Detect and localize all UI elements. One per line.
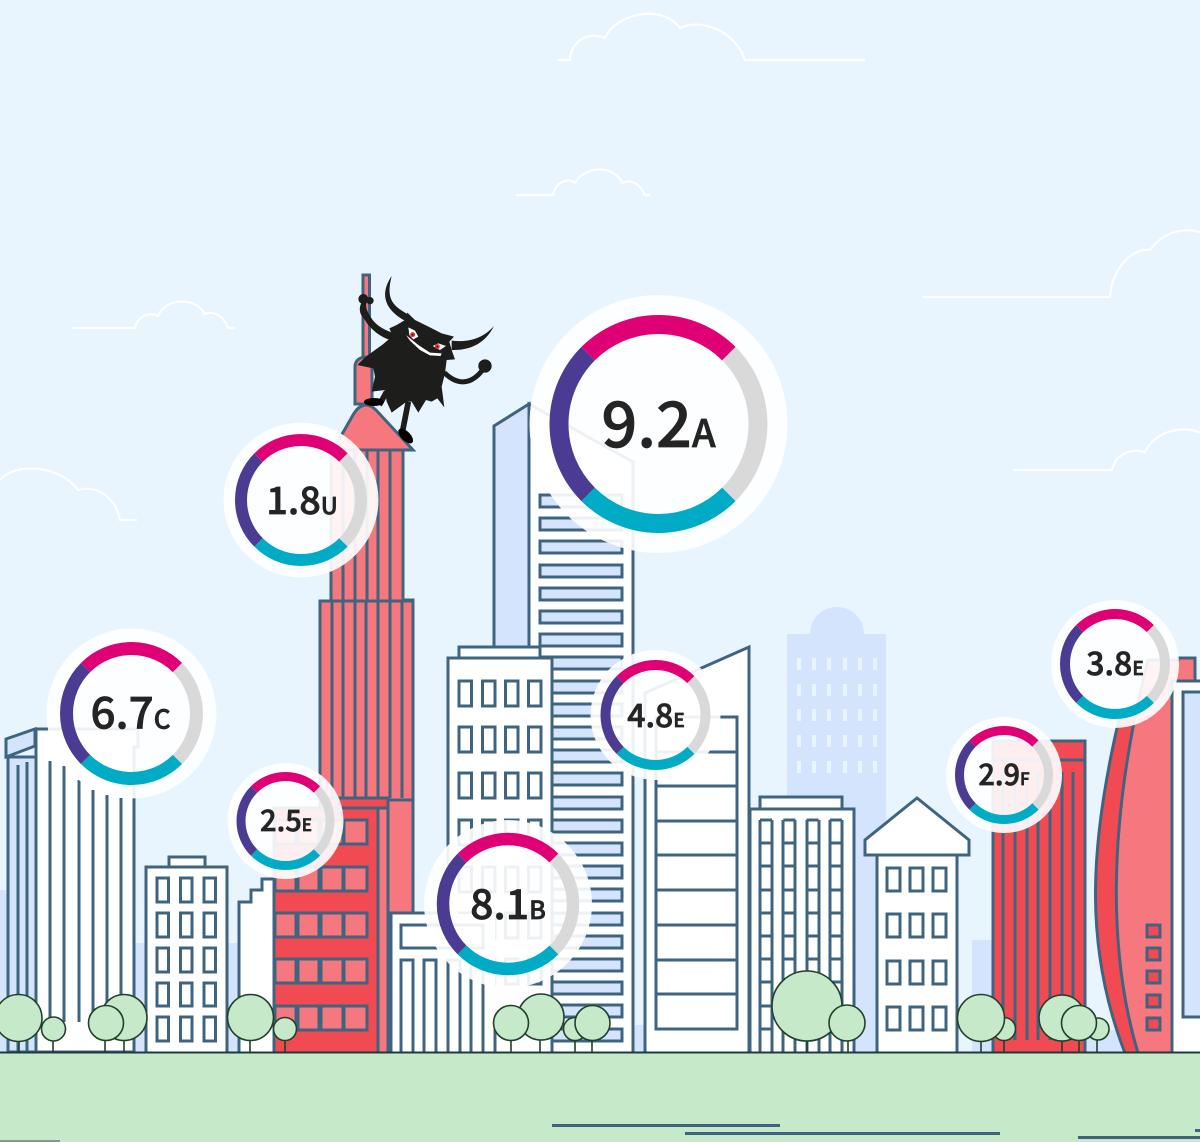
building: red striped block (993, 741, 1085, 1053)
building: red spire tower (274, 275, 413, 1053)
monster on the spire (357, 276, 494, 446)
building: tall glass tower (494, 404, 633, 1053)
building: gridded block (750, 797, 854, 1053)
clouds (0, 14, 1200, 520)
building: curved red tower (1095, 658, 1200, 1053)
rating ring: 8.1 B (424, 820, 592, 988)
rating ring: 1.8 U (224, 422, 378, 578)
rating ring: 2.9 F: 2.9F (978, 752, 1030, 794)
building: house-roof block (865, 798, 969, 1053)
rating ring: 4.8 E: 4.8E (627, 691, 685, 737)
rating ring: 6.7 C (46, 628, 216, 798)
trees (0, 971, 1109, 1052)
building: angled white tower (645, 647, 749, 1053)
rating ring: 3.8 E (1051, 600, 1179, 728)
rating ring: 2.5 E: 2.5E (260, 798, 312, 840)
rating ring: 2.5 E (228, 763, 344, 879)
building: low white annex (391, 913, 495, 1052)
ground (0, 1052, 1200, 1142)
rating ring: 8.1 B: 8.1B (470, 871, 546, 931)
rating ring: 1.8 U: 1.8U (266, 470, 338, 525)
building: front windowed tower (448, 647, 552, 1053)
building: left white tower (6, 729, 138, 1052)
rating ring: 4.8 E (590, 650, 720, 780)
rating ring: 2.9 F (946, 717, 1062, 833)
rating ring: 9.2 A (530, 295, 788, 553)
rating ring: 9.2 A: 9.2A (601, 375, 716, 466)
rating ring: 3.8 E: 3.8E (1086, 639, 1144, 685)
building: stepped white (239, 879, 275, 1053)
building: windowed block (146, 857, 227, 1053)
rating ring: 6.7 C: 6.7C (90, 678, 171, 742)
faint background buildings (0, 607, 1124, 1052)
